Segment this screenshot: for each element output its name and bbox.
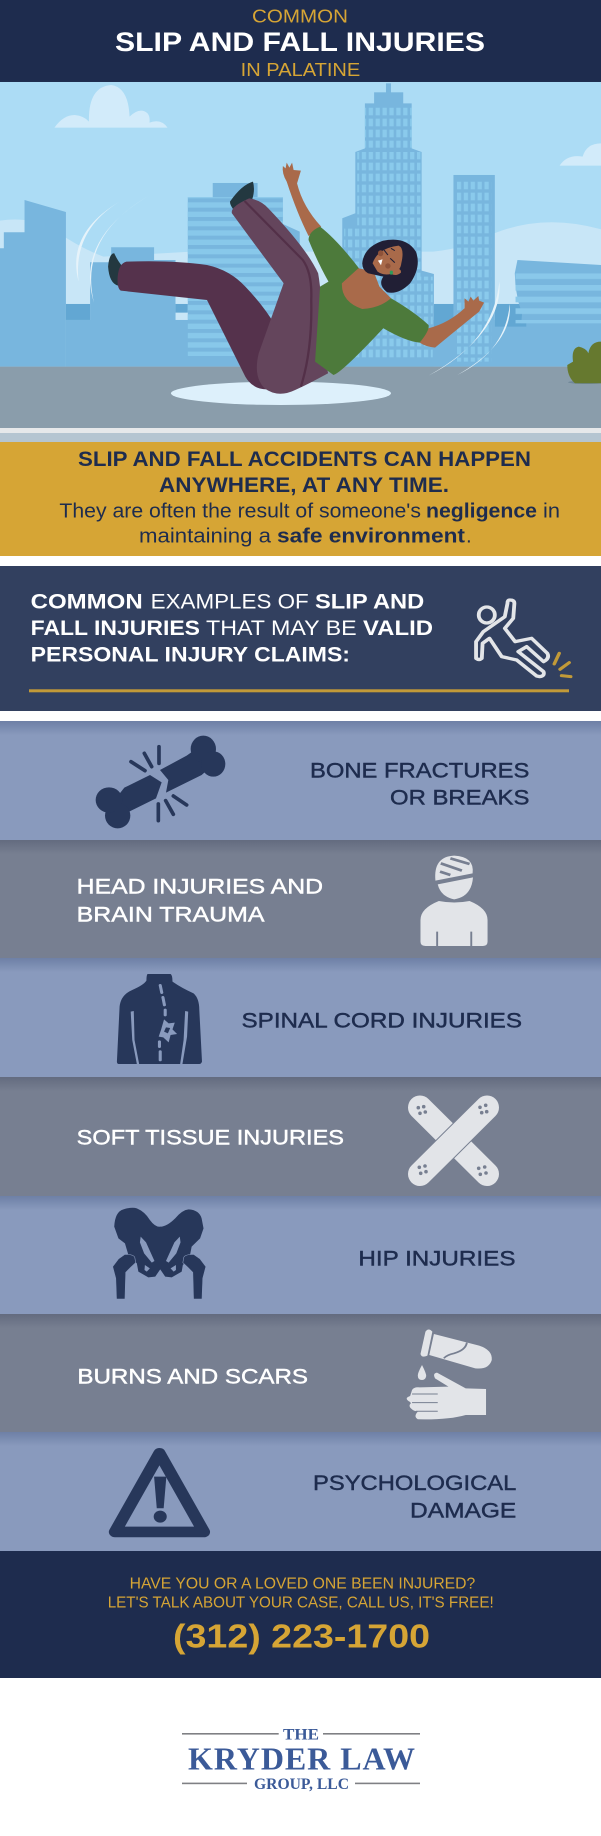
phone number: (312) 223-1700	[173, 1617, 430, 1654]
panel heading: COMMON	[31, 590, 143, 613]
panel heading: VALID	[363, 617, 433, 640]
label: HEAD INJURIES AND	[77, 874, 323, 898]
intro body: maintaining a	[139, 525, 272, 548]
icon: pelvis	[113, 1208, 206, 1299]
item: psychological damage	[0, 1432, 601, 1551]
item: soft tissue injuries	[0, 1077, 601, 1196]
main title: SLIP AND FALL INJURIES	[115, 27, 485, 57]
clouds	[54, 85, 601, 166]
call to action band: LET'S TALK ABOUT YOUR CASE, CALL US, IT'S FREE!	[108, 1594, 494, 1611]
logo: the kryder law group: THE	[283, 1726, 319, 1743]
pants seam	[245, 201, 311, 387]
icon: chemical dripping on hand	[407, 1329, 492, 1419]
panel heading: EXAMPLES OF	[151, 590, 309, 613]
panel heading	[31, 590, 433, 667]
intro body: They are often the result of someone's	[59, 499, 421, 522]
icon: crossed bandages	[416, 1104, 489, 1176]
sky	[0, 82, 601, 369]
panel heading: SLIP AND	[315, 590, 424, 613]
logo: the kryder law group	[182, 1726, 420, 1793]
green shirt	[309, 227, 429, 375]
icon: falling person	[476, 600, 571, 677]
call to action text: HAVE YOU OR A LOVED ONE BEEN INJURED?	[130, 1575, 475, 1592]
intro body: negligence	[426, 499, 537, 522]
pavement	[0, 367, 601, 429]
call to action band	[0, 1551, 601, 1678]
label: BURNS AND SCARS	[77, 1364, 308, 1388]
intro body: safe environment	[277, 525, 465, 548]
header band	[0, 0, 601, 82]
item: psychological damage: DAMAGE	[410, 1498, 516, 1522]
item: head injuries: BRAIN TRAUMA	[77, 903, 265, 927]
item: hip injuries	[0, 1196, 601, 1314]
item: spinal cord injuries	[0, 958, 601, 1077]
icon: back with injured spine	[117, 974, 202, 1064]
pale hills	[0, 220, 601, 367]
intro body: .	[466, 525, 472, 548]
bush	[567, 342, 601, 384]
intro body	[59, 499, 560, 548]
chest and neck	[342, 268, 391, 309]
wet puddle	[171, 382, 391, 405]
back leg	[118, 261, 276, 389]
gold divider	[29, 689, 569, 692]
label: SOFT TISSUE INJURIES	[77, 1125, 344, 1149]
header line: location: IN PALATINE	[241, 59, 360, 80]
label: SPINAL CORD INJURIES	[242, 1009, 522, 1033]
road edge stripes	[0, 428, 601, 442]
right arm	[420, 296, 484, 348]
intro heading: SLIP AND FALL ACCIDENTS CAN HAPPEN	[78, 448, 531, 471]
hair	[362, 240, 418, 293]
icon: bandaged head and shoulders	[420, 856, 488, 946]
skyline buildings	[0, 83, 601, 367]
gold intro panel: ANYWHERE, AT ANY TIME.	[159, 474, 449, 497]
header line: common: COMMON	[252, 6, 348, 27]
label: HIP INJURIES	[358, 1247, 516, 1271]
panel heading: THAT MAY BE	[206, 617, 357, 640]
intro body: in	[543, 499, 560, 522]
item: bone fractures: OR BREAKS	[390, 786, 529, 810]
label: BONE FRACTURES	[310, 758, 529, 782]
item: bone fractures	[0, 721, 601, 840]
panel heading: FALL INJURIES	[31, 617, 200, 640]
logo: the kryder law group: GROUP, LLC	[254, 1776, 349, 1793]
gold intro panel	[0, 442, 601, 556]
item: head injuries	[0, 840, 601, 958]
icon: warning triangle	[115, 1453, 204, 1532]
front leg	[232, 198, 328, 394]
label: PSYCHOLOGICAL	[313, 1471, 516, 1495]
shoes	[108, 182, 254, 286]
cheeks, eyes and mouth	[378, 248, 395, 275]
icon: broken bone	[96, 736, 225, 828]
bandage dots	[416, 1104, 489, 1176]
item: burns and scars	[0, 1314, 601, 1432]
hero illustration: woman slipping in a city	[0, 82, 601, 429]
face	[373, 246, 403, 275]
motion swooshes	[76, 196, 510, 376]
raised arm	[283, 163, 321, 236]
logo: the kryder law group: KRYDER LAW	[188, 1740, 415, 1776]
panel heading: PERSONAL INJURY CLAIMS:	[31, 644, 350, 667]
navy examples panel	[0, 566, 601, 711]
